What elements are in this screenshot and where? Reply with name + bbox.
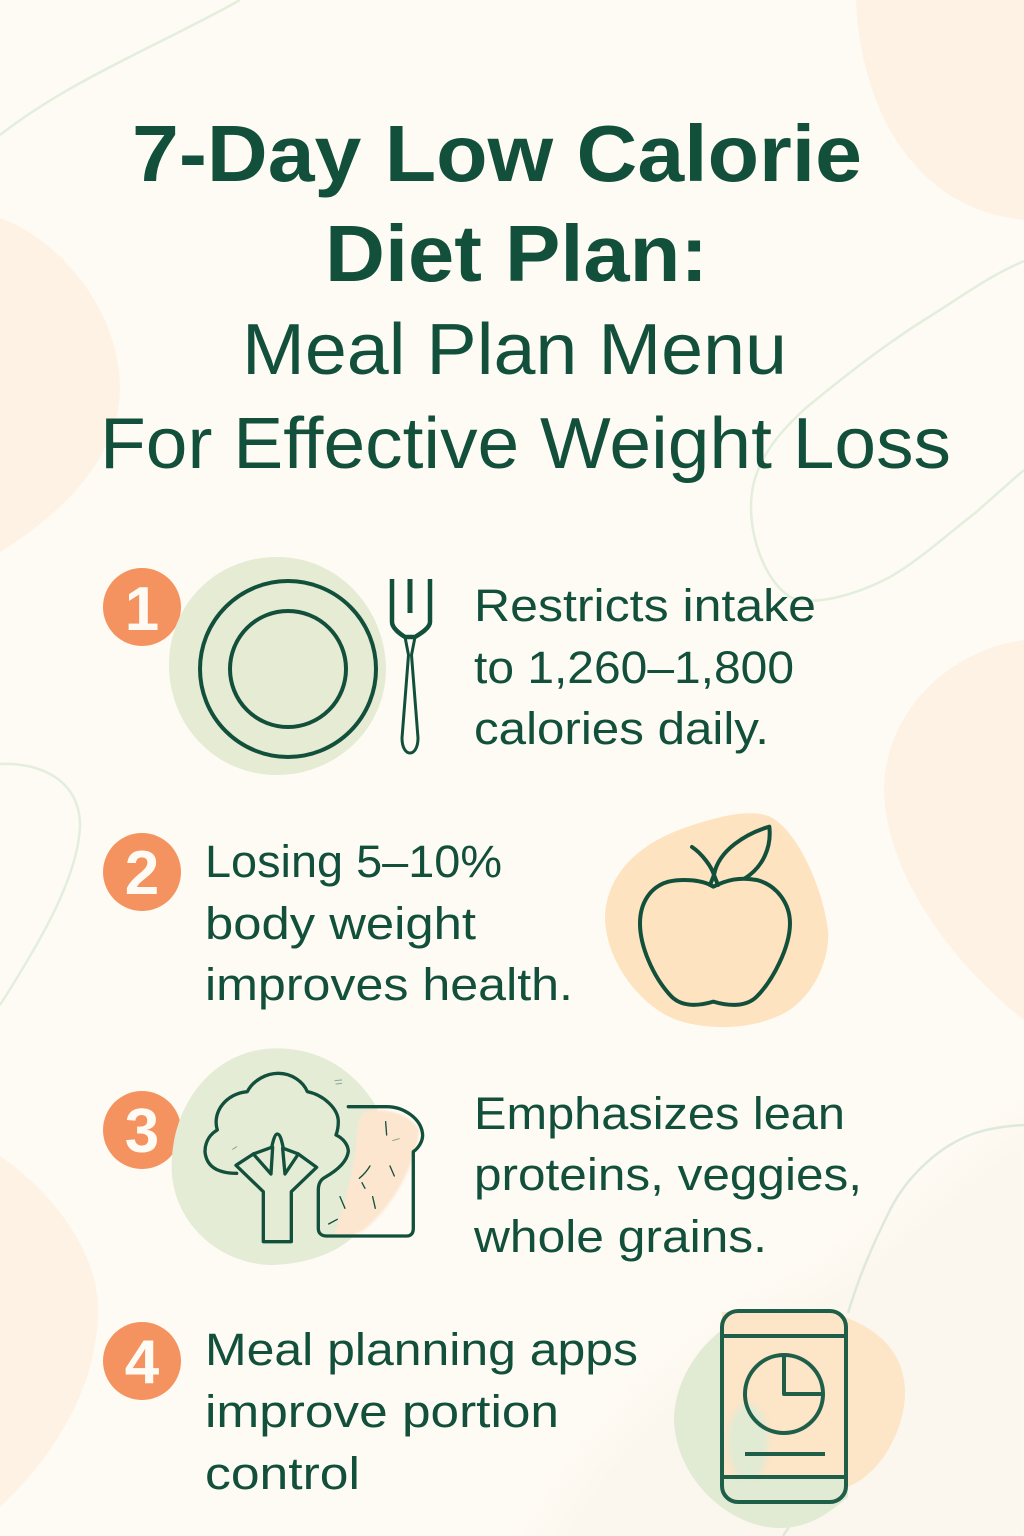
icon: phone with pie chart [674, 1311, 905, 1528]
text 4: improve portion [205, 1386, 559, 1437]
icon: apple [605, 813, 828, 1027]
title [132, 109, 862, 298]
text 4: control [205, 1448, 360, 1499]
number badge 4 [103, 1322, 181, 1400]
text 1: to 1,260–1,800 [474, 642, 794, 693]
item 4 [103, 1311, 905, 1528]
text 1 [474, 580, 816, 754]
text 1: calories daily. [474, 703, 769, 754]
title: Diet Plan: [325, 209, 708, 298]
number badge 2: 2 [125, 839, 159, 908]
subtitle [100, 310, 951, 484]
text 4 [205, 1324, 638, 1499]
text 3 [473, 1088, 862, 1262]
number badge 3: 3 [125, 1097, 159, 1166]
subtitle: For Effective Weight Loss [100, 404, 951, 484]
title: 7-Day Low Calorie [132, 109, 862, 198]
icon: broccoli and bread [172, 1048, 423, 1265]
number badge 1: 1 [125, 575, 159, 644]
text 2: Losing 5–10% [205, 836, 502, 887]
number badge 2 [103, 833, 181, 911]
text 4: Meal planning apps [205, 1324, 638, 1375]
number badge 1 [103, 568, 181, 646]
text 1: Restricts intake [474, 580, 816, 631]
number badge 4: 4 [125, 1328, 160, 1397]
text 3: proteins, veggies, [474, 1149, 862, 1200]
subtitle: Meal Plan Menu [242, 310, 787, 390]
text 3: Emphasizes lean [474, 1088, 845, 1139]
text 2: body weight [205, 898, 477, 949]
item 2 [103, 813, 828, 1027]
item 1 [103, 557, 816, 775]
number badge 3 [103, 1091, 181, 1169]
item 3 [103, 1048, 862, 1265]
icon: plate and fork [169, 557, 430, 775]
text 2: improves health. [205, 959, 573, 1010]
text 3: whole grains. [473, 1211, 767, 1262]
text 2 [205, 836, 573, 1010]
